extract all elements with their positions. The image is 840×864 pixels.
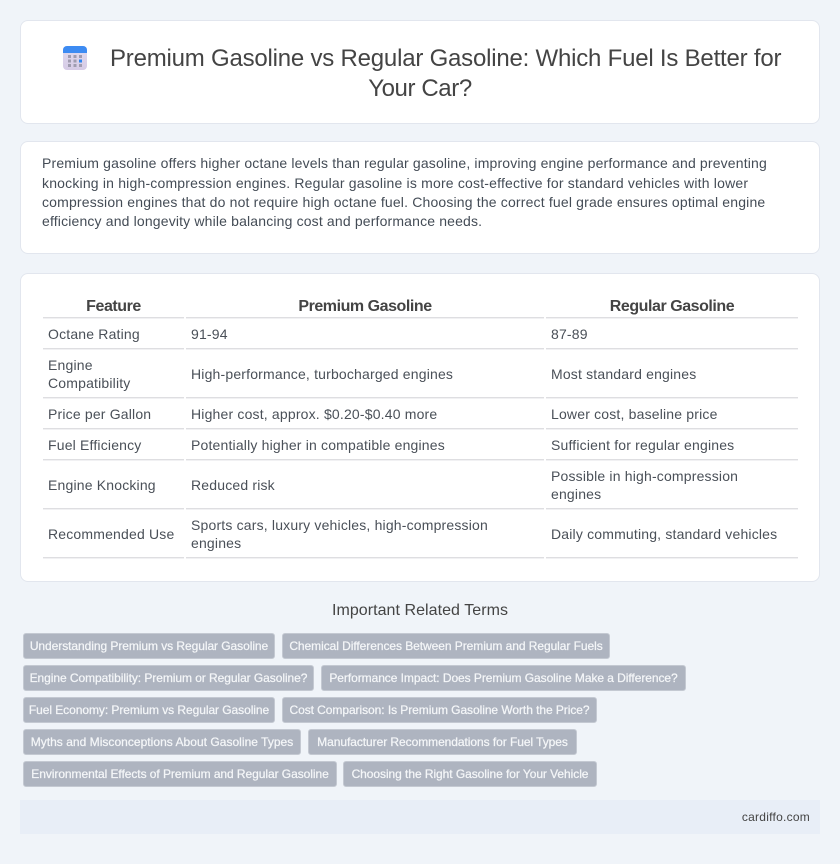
row: engine compatibility: Compatibility <box>48 375 130 391</box>
row: engine knocking: Possible in high-compression <box>551 468 738 484</box>
row: octane rating: 91-94 <box>191 326 228 342</box>
related term tags: Chemical Differences Between Premium and Regular Fuels <box>289 639 603 653</box>
title <box>110 45 782 102</box>
intro paragraph: knocking in high-compression engines. Regular gasoline is more cost-effective for standard vehicles with lower <box>42 175 748 191</box>
panel: intro text <box>20 141 820 254</box>
row: fuel efficiency <box>48 437 734 453</box>
row: recommended use <box>48 517 777 551</box>
column headers: Premium Gasoline <box>298 298 432 315</box>
row: octane rating: 87-89 <box>551 326 588 342</box>
row: price per gallon: Higher cost, approx. $0.20-$0.40 more <box>191 406 437 422</box>
row: engine compatibility <box>48 357 696 391</box>
panel: title card <box>20 20 820 124</box>
row: octane rating: Octane Rating <box>48 326 140 342</box>
row: engine knocking: Engine Knocking <box>48 477 156 493</box>
row: recommended use: Sports cars, luxury vehicles, high-compression <box>191 517 488 533</box>
related term tags: Manufacturer Recommendations for Fuel Types <box>317 735 568 749</box>
row: engine compatibility: Most standard engines <box>551 366 696 382</box>
row: recommended use: Recommended Use <box>48 526 174 542</box>
title: Your Car? <box>368 75 472 102</box>
row: fuel efficiency: Sufficient for regular engines <box>551 437 734 453</box>
related term tags: Myths and Misconceptions About Gasoline Types <box>31 735 293 749</box>
row: price per gallon <box>48 406 718 422</box>
related term tags: Fuel Economy: Premium vs Regular Gasoline <box>29 703 269 717</box>
column headers <box>86 298 734 315</box>
related term tags: Environmental Effects of Premium and Regular Gasoline <box>31 767 329 781</box>
heading: related terms: Important Related Terms <box>332 602 508 619</box>
row: engine compatibility: Engine <box>48 357 93 373</box>
row: price per gallon: Lower cost, baseline price <box>551 406 718 422</box>
related term tags: Performance Impact: Does Premium Gasoline Make a Difference? <box>329 671 678 685</box>
related term tags: Understanding Premium vs Regular Gasoline <box>30 639 268 653</box>
row: recommended use: engines <box>191 535 241 551</box>
column headers: Feature <box>86 298 141 315</box>
row: fuel efficiency: Fuel Efficiency <box>48 437 141 453</box>
row: recommended use: Daily commuting, standard vehicles <box>551 526 777 542</box>
row: octane rating <box>48 326 588 342</box>
related term tags: Engine Compatibility: Premium or Regular Gasoline? <box>30 671 307 685</box>
row: engine knocking <box>48 468 738 502</box>
column headers: Regular Gasoline <box>610 298 734 315</box>
comparison table <box>43 298 798 559</box>
row: engine knocking: engines <box>551 486 601 502</box>
row: fuel efficiency: Potentially higher in compatible engines <box>191 437 445 453</box>
related term tags: Cost Comparison: Is Premium Gasoline Worth the Price? <box>289 703 590 717</box>
row: engine compatibility: High-performance, turbocharged engines <box>191 366 453 382</box>
row: price per gallon: Price per Gallon <box>48 406 151 422</box>
footer bar <box>20 800 820 834</box>
row: engine knocking: Reduced risk <box>191 477 275 493</box>
intro paragraph: compression engines that do not require high octane fuel. Choosing the correct fuel grade ensures optimal engine <box>42 194 765 210</box>
intro paragraph <box>42 155 767 229</box>
related term tags <box>23 633 686 787</box>
icon: calendar <box>63 46 87 70</box>
title: Premium Gasoline vs Regular Gasoline: Which Fuel Is Better for <box>110 45 781 72</box>
related term tags: Choosing the Right Gasoline for Your Vehicle <box>352 767 588 781</box>
intro paragraph: efficiency and longevity while balancing cost and performance needs. <box>42 213 482 229</box>
footer credit: cardiffo.com <box>742 810 810 824</box>
intro paragraph: Premium gasoline offers higher octane levels than regular gasoline, improving engine performance and preventing <box>42 155 767 171</box>
panel: comparison table <box>20 273 820 582</box>
